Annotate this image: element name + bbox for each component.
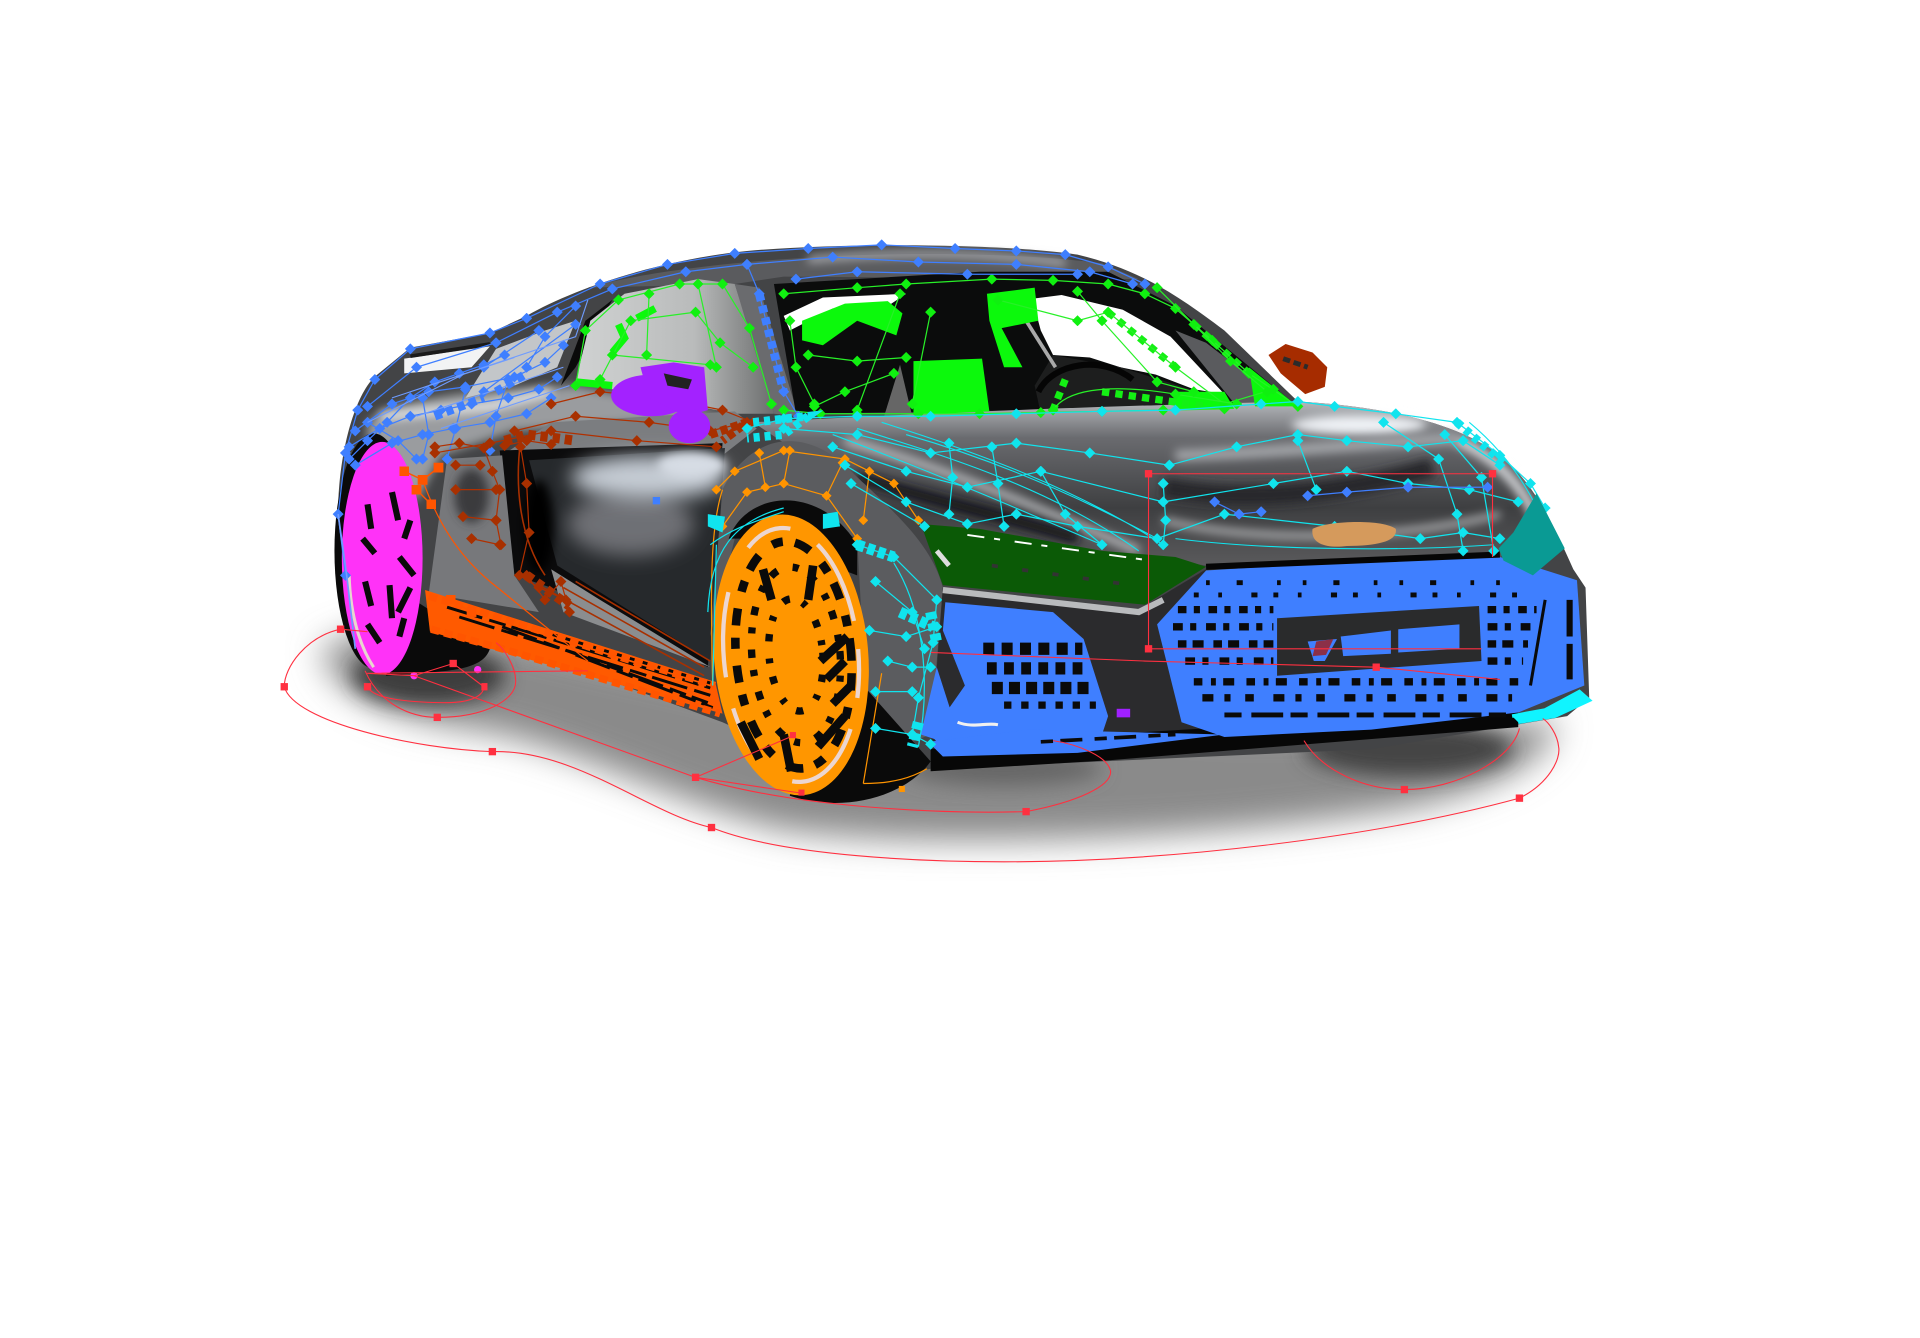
tan hood badge: [1312, 522, 1396, 547]
cyan hood mesh: [708, 402, 1589, 747]
rear tyre: [334, 433, 490, 676]
blue front bumper: [1157, 555, 1584, 737]
front wheel arch and tyre: [729, 500, 931, 803]
blue hood handles: [1215, 487, 1488, 514]
blue roof and rear quarter mesh: [338, 245, 1145, 649]
ground shadow: [321, 612, 1557, 840]
green cabin blobs: [576, 288, 1298, 415]
front lower bodywork: [931, 569, 1518, 771]
side air intake: [429, 443, 727, 667]
orange sill: [425, 590, 723, 714]
dark red side mirror: [1268, 344, 1327, 394]
number plate: [1277, 606, 1481, 676]
rear door mesh in brown: [435, 392, 753, 676]
purple side mirror: [611, 362, 710, 443]
dark green side vent: [921, 524, 1206, 605]
red ground curves and guide lines: [281, 470, 1559, 862]
car body silhouette: [338, 245, 1589, 783]
hood: [753, 402, 1552, 566]
orange fender mesh: [404, 450, 927, 792]
upper door panel: [502, 411, 757, 455]
front wheel in orange: [702, 508, 880, 802]
blue left grille: [921, 602, 1224, 757]
green window mesh: [576, 279, 1298, 414]
front fender: [710, 441, 943, 759]
windshield and cabin: [774, 272, 1298, 416]
teal headlight: [1499, 493, 1565, 575]
side window: [561, 279, 798, 416]
blue anchor point on door: [653, 497, 660, 504]
rear wheel in magenta: [342, 442, 481, 679]
roof shading: [368, 253, 1139, 502]
